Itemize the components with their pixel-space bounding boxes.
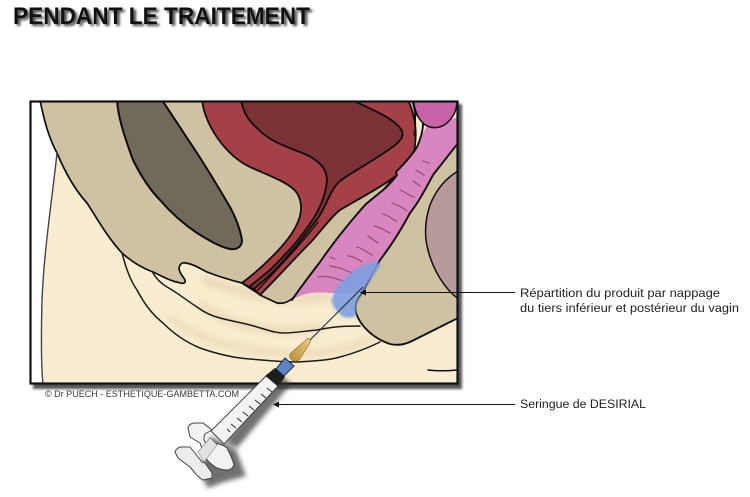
label: syringe: Seringue de DESIRIAL xyxy=(520,397,646,411)
syringe hub xyxy=(290,338,311,361)
syringe shadow xyxy=(200,374,291,488)
syringe blue collar xyxy=(276,358,294,376)
syringe plunger rod xyxy=(198,438,217,462)
upper pink organ xyxy=(413,100,457,128)
syringe graduations xyxy=(227,388,272,432)
product layer: blue patch xyxy=(332,262,380,318)
callout: product distribution xyxy=(360,286,739,315)
label: product distribution: du tiers inférieur et postérieur du vagin xyxy=(520,301,739,315)
small lower-right crease xyxy=(428,369,457,372)
arrow: to syringe xyxy=(273,402,515,408)
skin area xyxy=(40,100,460,384)
dark red bladder xyxy=(241,100,403,289)
rectum xyxy=(426,170,460,300)
panel shadow xyxy=(33,104,462,389)
syringe barrel xyxy=(211,376,278,444)
vaginal wall pink xyxy=(292,116,462,300)
syringe plunger flange xyxy=(175,447,212,480)
vaginal folds xyxy=(318,161,429,284)
red uterus outer xyxy=(202,100,416,295)
label: product distribution: Répartition du produit par nappage xyxy=(520,286,720,300)
title: PENDANT LE TRAITEMENT xyxy=(13,3,310,30)
icon: syringe xyxy=(175,287,363,488)
labia shading xyxy=(170,280,372,354)
syringe finger flange xyxy=(188,423,234,470)
pubic bone xyxy=(117,100,242,249)
copyright credit: © Dr PUECH - ESTHETIQUE-GAMBETTA.COM xyxy=(45,389,239,399)
skin outlines xyxy=(122,253,380,362)
urethra strip line xyxy=(257,222,318,291)
arrow: to vaginal wall xyxy=(360,290,515,296)
title: PENDANT LE TRAITEMENT xyxy=(16,5,313,32)
tan pelvic tissue xyxy=(40,100,420,303)
callout: syringe xyxy=(273,397,646,411)
syringe black cap xyxy=(265,368,285,387)
needle xyxy=(304,287,363,346)
panel: anatomical cross-section xyxy=(30,100,462,384)
right tan tissue xyxy=(356,146,456,344)
